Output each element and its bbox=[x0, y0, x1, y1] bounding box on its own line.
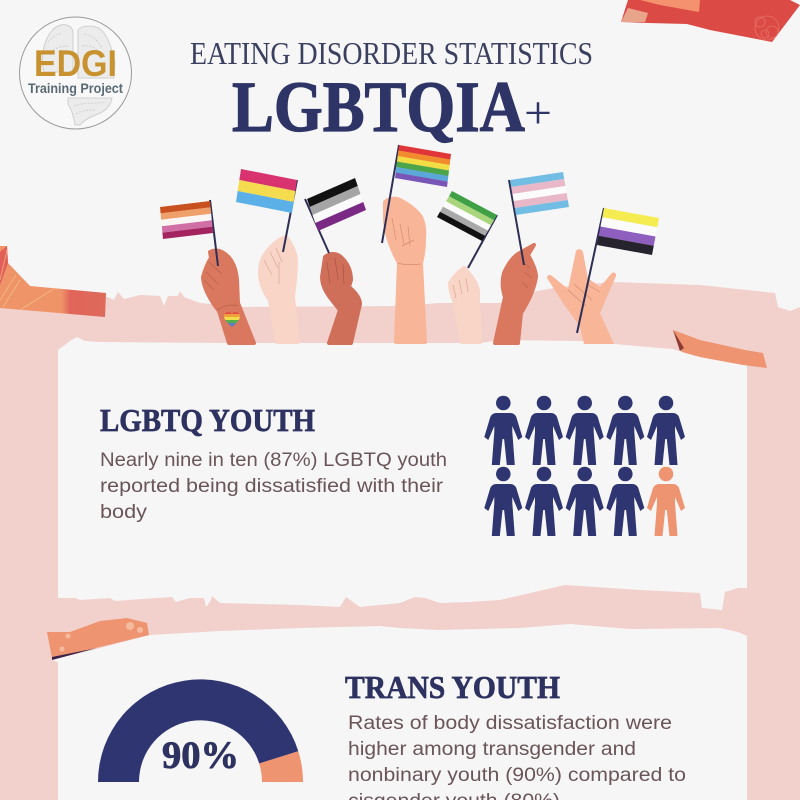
brain illustration bbox=[42, 25, 115, 125]
aromantic flag bbox=[437, 191, 497, 268]
hand with lesbian flag bbox=[203, 250, 254, 343]
hand with aromantic flag bbox=[450, 268, 480, 342]
lesbian flag bbox=[160, 200, 218, 266]
hands holding pride flags bbox=[160, 145, 659, 344]
gauge chart: 90 percent bbox=[98, 679, 303, 782]
gauge value: 90% bbox=[162, 734, 239, 777]
hand with asexual flag bbox=[322, 254, 360, 343]
pink brush background bbox=[0, 282, 800, 800]
hand with nonbinary flag bbox=[547, 249, 616, 344]
rainbow flag bbox=[382, 145, 451, 243]
title bbox=[190, 35, 593, 147]
EDGI wordmark: EDGI bbox=[34, 43, 117, 84]
panel: trans youth background bbox=[52, 624, 747, 800]
top right red tape bbox=[621, 0, 800, 42]
heading: LGBTQ youth: LGBTQ YOUTH bbox=[100, 402, 315, 438]
text block: trans youth statistic: nonbinary youth (90%) compared to bbox=[348, 765, 686, 786]
heading: trans youth: TRANS YOUTH bbox=[345, 669, 560, 705]
text block: LGBTQ youth statistic: body bbox=[100, 502, 148, 523]
logo: EDGI Training Project bbox=[20, 17, 132, 129]
Training Project wordmark: Training Project bbox=[28, 80, 123, 96]
text block: trans youth statistic: Rates of body dissatisfaction were bbox=[348, 713, 672, 734]
hand with transgender flag bbox=[495, 245, 536, 343]
panel: LGBTQ youth background bbox=[58, 337, 747, 610]
left orange tape bbox=[0, 246, 106, 317]
text block: LGBTQ youth statistic: reported being dissatisfied with their bbox=[100, 476, 444, 497]
lower left orange tape bbox=[47, 618, 149, 660]
nonbinary flag bbox=[577, 208, 659, 333]
plus sign: + bbox=[524, 87, 552, 138]
subtitle: EATING DISORDER STATISTICS bbox=[190, 35, 593, 71]
hand with pansexual flag bbox=[260, 237, 298, 342]
transgender flag bbox=[509, 172, 569, 265]
hand with rainbow flag bbox=[385, 199, 425, 342]
main heading: LGBTQIA bbox=[232, 67, 525, 147]
right orange tape bbox=[673, 330, 767, 368]
asexual flag bbox=[305, 178, 366, 253]
icon: ten people, nine highlighted bbox=[484, 396, 685, 536]
text block: trans youth statistic: higher among transgender and bbox=[348, 739, 636, 760]
pansexual flag bbox=[236, 169, 297, 252]
text block: LGBTQ youth statistic: Nearly nine in ten (87%) LGBTQ youth bbox=[100, 450, 447, 471]
